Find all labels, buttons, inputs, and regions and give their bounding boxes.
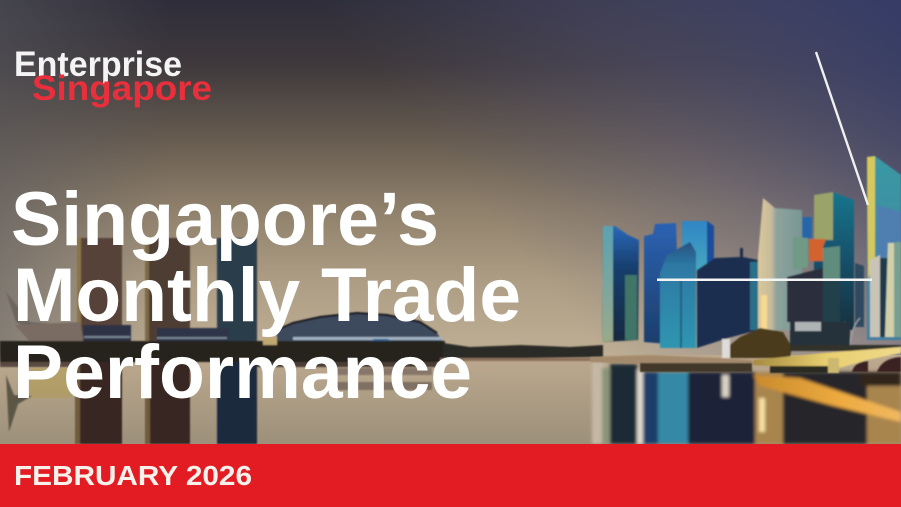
decorative light line: horizontal (657, 278, 872, 281)
logo: Enterprise Singapore: Enterprise (14, 45, 182, 84)
background: water (0, 355, 901, 445)
water reflections of towers (592, 362, 901, 444)
title: Singapore’s (11, 177, 439, 262)
title: Monthly Trade (13, 253, 521, 338)
logo: Enterprise Singapore (14, 45, 212, 108)
skyline left: gardens and convention centre (0, 238, 605, 444)
title (11, 177, 521, 415)
decorative light line: diagonal (816, 52, 868, 205)
skyline right: Marina Bay towers (590, 156, 901, 373)
date banner (0, 444, 901, 507)
background: dusk sky (0, 0, 901, 360)
logo: Enterprise Singapore: Singapore (32, 69, 212, 108)
date banner: FEBRUARY 2026 (14, 460, 252, 491)
title: Performance (13, 330, 472, 415)
